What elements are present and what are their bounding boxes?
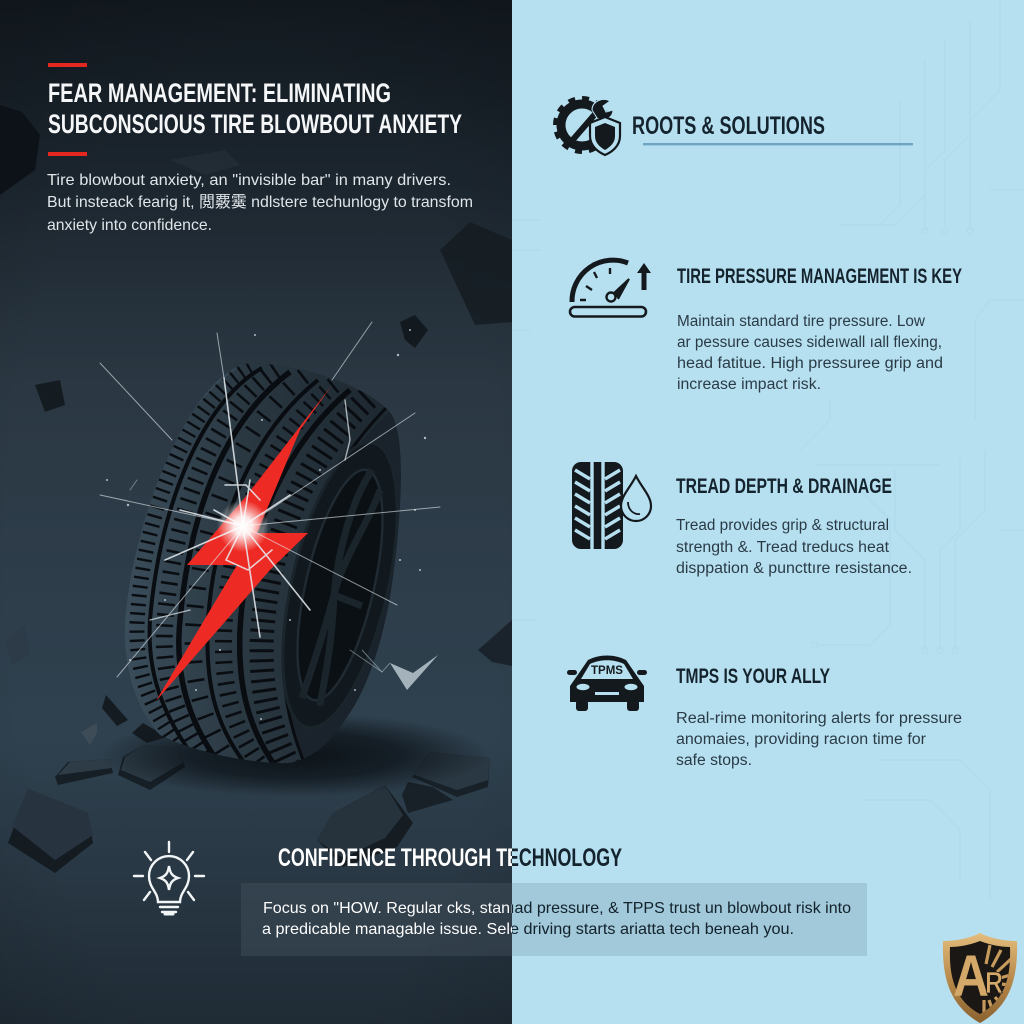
tire shadow xyxy=(100,713,490,797)
body text: head fatitue. High pressuree grip and xyxy=(677,355,943,372)
body text: Real-rime monitoring alerts for pressure xyxy=(676,710,962,727)
confidence text xyxy=(262,900,851,938)
body text xyxy=(677,313,943,393)
body text: strength &. Tread treducs heat xyxy=(676,539,890,556)
panel: confidence band xyxy=(241,883,867,956)
body text: safe stops. xyxy=(676,752,752,769)
logo: AR shield: R xyxy=(985,965,1003,1000)
heading: TREAD DEPTH & DRAINAGE xyxy=(676,475,892,498)
intro text: Tire blowbout anxiety, an "invisible bar" in many drivers. xyxy=(47,172,451,189)
confidence text: a predicable managable issue. Sele driving starts ariatta tech beneah you. xyxy=(262,921,794,938)
circuit pattern xyxy=(512,0,1024,900)
accent bar top xyxy=(48,63,87,67)
panel: light right background xyxy=(512,0,1024,1024)
section: TPMS xyxy=(567,656,962,769)
icon: red lightning bolt xyxy=(156,385,332,701)
intro text xyxy=(47,172,473,234)
icon: tread and water drop xyxy=(572,462,651,549)
intro text: anxiety into confidence. xyxy=(47,217,212,234)
section: tire pressure xyxy=(570,260,962,393)
body text: increase impact risk. xyxy=(677,376,821,393)
body text: disppation & puncttıre resistance. xyxy=(676,560,912,577)
heading: roots and solutions: ROOTS & SOLUTIONS xyxy=(632,112,825,140)
title: SUBCONSCIOUS TIRE BLOWBOUT ANXIETY xyxy=(48,109,462,139)
heading underline xyxy=(643,143,913,145)
glass shard xyxy=(362,650,438,690)
body text: anomaies, providing racıon time for xyxy=(676,731,926,748)
body text: Tread provides grip & structural xyxy=(676,517,889,534)
icon: pressure gauge xyxy=(570,260,651,316)
icon: car with TPMS label: TPMS xyxy=(591,665,623,677)
illustration: wheel rim xyxy=(260,432,420,738)
glass speckles xyxy=(106,329,426,720)
icon: car with TPMS label xyxy=(567,656,647,711)
glow: impact flash xyxy=(217,500,269,552)
body text xyxy=(676,710,962,769)
section: tread depth xyxy=(572,462,912,577)
debris: floating and ground rock fragments xyxy=(0,105,512,873)
title xyxy=(48,78,462,139)
illustration: tire with tread xyxy=(120,360,401,770)
logo: AR shield xyxy=(943,933,1017,1023)
heading: TMPS IS YOUR ALLY xyxy=(676,665,830,688)
illustration: shattered glass cracks xyxy=(100,322,440,677)
panel: dark left background xyxy=(0,0,512,1024)
body text: ar pessure causes sideıwall ıall flexing, xyxy=(677,334,942,351)
intro text: But insteack fearig it, 閲覈霙 ndlstere techunlogy to transfom xyxy=(47,194,473,211)
confidence text: Focus on "HOW. Regular cks, stanıad pressure, & TPPS trust un blowbout risk into xyxy=(263,900,851,917)
icon: gear, wrench and shield xyxy=(556,99,620,155)
title: FEAR MANAGEMENT: ELIMINATING xyxy=(48,78,391,108)
icon: lightbulb xyxy=(134,842,204,914)
panel: header block xyxy=(47,63,473,234)
accent bar bottom xyxy=(48,152,87,156)
logo: AR shield: A xyxy=(953,944,989,1009)
body text: Maintain standard tire pressure. Low xyxy=(677,313,926,330)
body text xyxy=(676,517,912,577)
heading: confidence through technology: CONFIDENCE THROUGH TECHNOLOGY xyxy=(278,844,622,872)
